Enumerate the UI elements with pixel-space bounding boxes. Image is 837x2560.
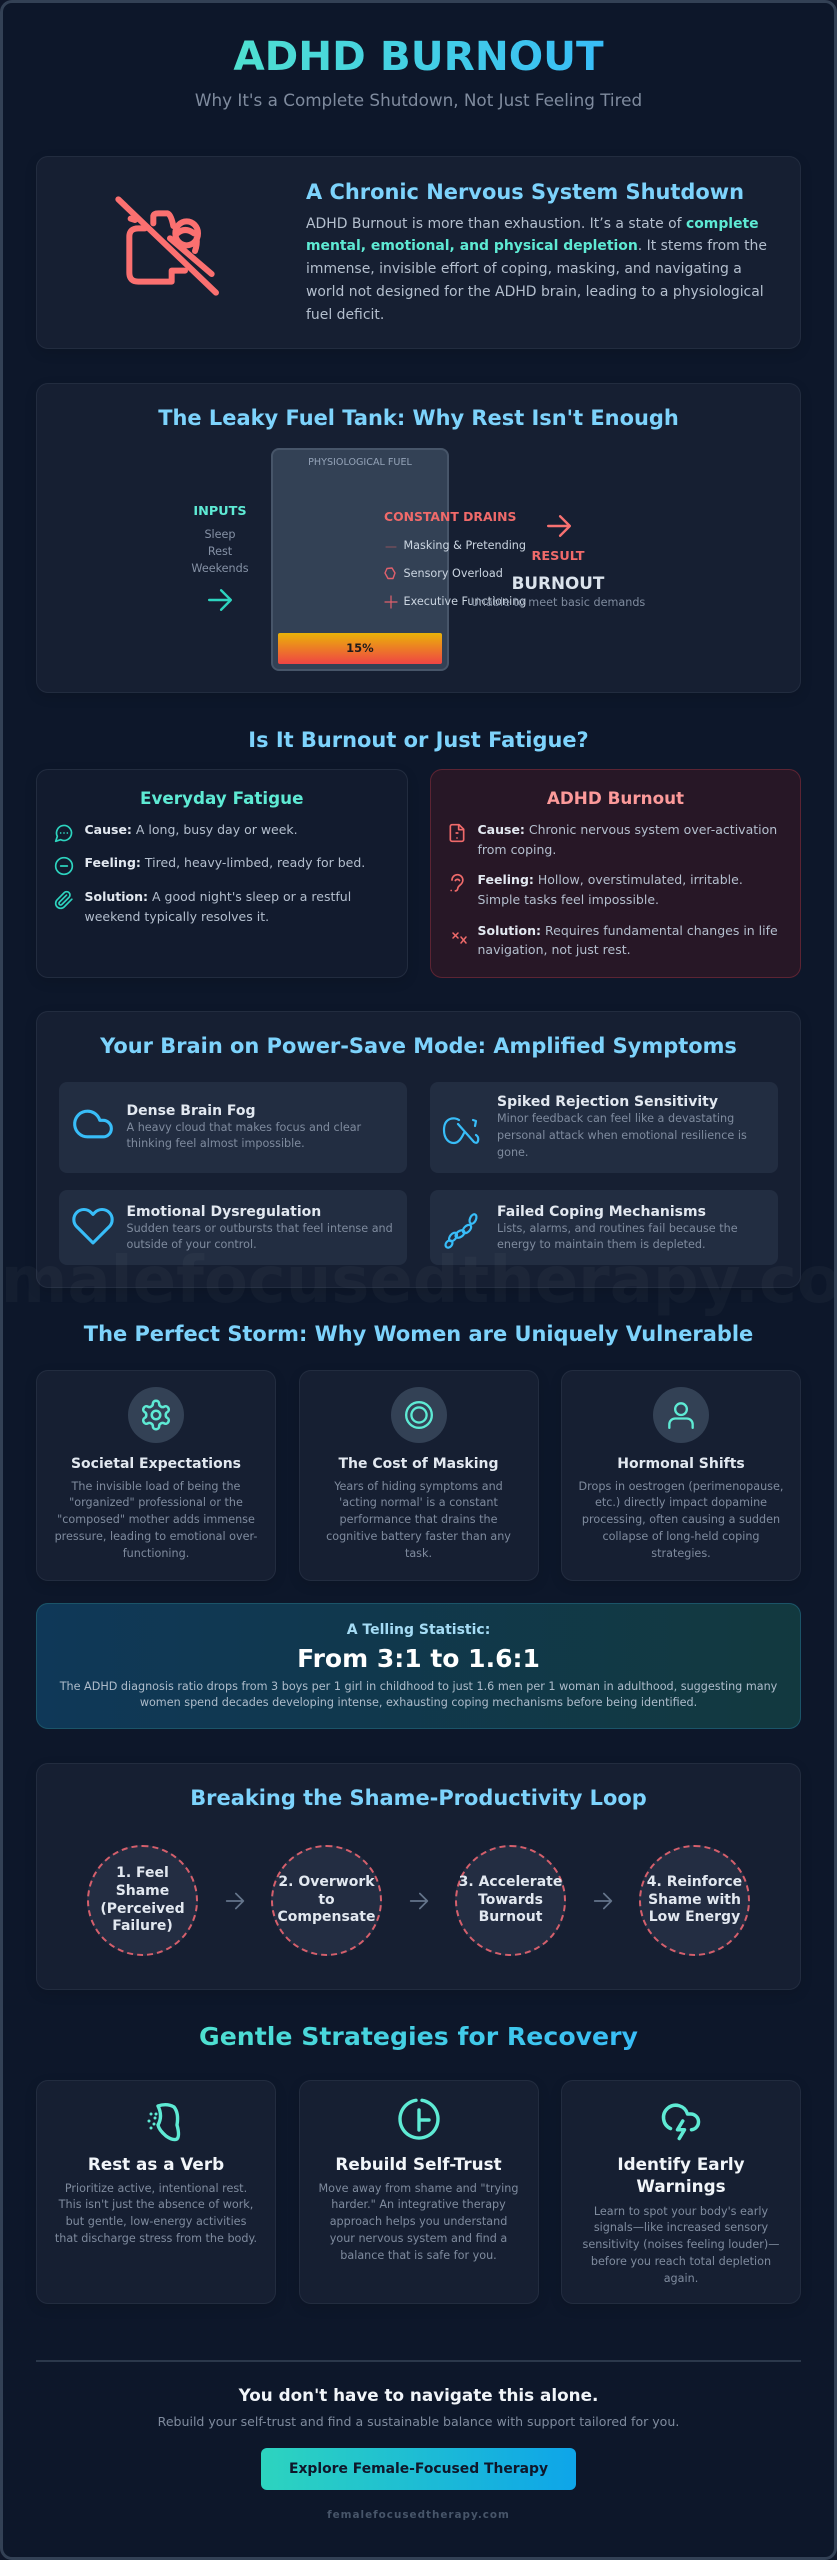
card text: cognitive battery faster than any bbox=[326, 1530, 511, 1543]
symptom text: gone. bbox=[497, 1146, 528, 1159]
card text: The invisible load of being the bbox=[72, 1480, 240, 1492]
card title: Rebuild Self-Trust bbox=[335, 2154, 502, 2174]
card text bbox=[298, 2181, 538, 2265]
fuel tank bbox=[271, 448, 449, 671]
arrow bbox=[593, 1891, 613, 1911]
panel: rest as a verb bbox=[36, 2080, 276, 2304]
symptom title: Failed Coping Mechanisms bbox=[497, 1204, 706, 1220]
symptom text: outside of your control. bbox=[126, 1238, 257, 1251]
icon circle bbox=[390, 1387, 446, 1443]
card text: approach helps you understand bbox=[330, 2215, 507, 2228]
icon: ear bbox=[450, 874, 464, 892]
row: cause: from coping. bbox=[478, 842, 556, 857]
panel heading: Everyday Fatigue bbox=[140, 788, 304, 808]
result description: Unable to meet basic demands bbox=[471, 596, 645, 608]
card text: Prioritize active, intentional rest. bbox=[65, 2182, 247, 2195]
card text: This isn't just the absence of work, bbox=[59, 2198, 253, 2211]
loop step 1: Shame bbox=[116, 1883, 169, 1899]
card text: collapse of long-held coping bbox=[602, 1530, 760, 1543]
panel: telling statistic bbox=[36, 1603, 801, 1729]
icon: gear bbox=[142, 1400, 170, 1430]
statistic label: A Telling Statistic: bbox=[347, 1622, 490, 1638]
body text: ADHD Burnout is more than exhaustion. It’s a state of complete bbox=[306, 216, 759, 232]
inputs bbox=[191, 504, 249, 611]
statistic text: The ADHD diagnosis ratio drops from 3 boys per 1 girl in childhood to just 1.6 men per 1 woman in adulthood, suggesting many bbox=[60, 1680, 777, 1693]
symptom title: Emotional Dysregulation bbox=[126, 1204, 321, 1220]
icon: executive bbox=[384, 595, 398, 609]
row: feeling: Feeling: Hollow, overstimulated, irritable. bbox=[478, 872, 743, 887]
card text: again. bbox=[664, 2272, 698, 2285]
symptom text bbox=[497, 1222, 738, 1251]
panel heading: ADHD Burnout bbox=[547, 788, 684, 808]
symptom text: energy to maintain them is depleted. bbox=[497, 1238, 706, 1251]
row: cause: Cause: A long, busy day or week. bbox=[84, 822, 298, 837]
card text bbox=[579, 1480, 783, 1560]
symptom text bbox=[497, 1112, 747, 1159]
icon circle bbox=[653, 1387, 709, 1443]
body text: fuel deficit. bbox=[306, 307, 384, 323]
card title: Rest as a Verb bbox=[88, 2154, 224, 2174]
title: ADHD BURNOUT bbox=[233, 32, 604, 80]
inputs list: Rest bbox=[208, 545, 232, 558]
loop step 1: Failure) bbox=[112, 1918, 173, 1934]
row: solution: Solution: Requires fundamental changes in life bbox=[478, 922, 778, 938]
footer heading: You don't have to navigate this alone. bbox=[239, 2385, 598, 2405]
heading: burnout or fatigue: Is It Burnout or Just Fatigue? bbox=[248, 728, 589, 752]
card text: 'acting normal' is a constant bbox=[339, 1496, 498, 1509]
symptom text: Lists, alarms, and routines fail because the bbox=[497, 1222, 738, 1234]
icon: file bbox=[450, 824, 464, 842]
icon: subscript x bbox=[452, 932, 467, 944]
card text bbox=[55, 1480, 257, 1560]
body text: world not designed for the ADHD brain, leading to a physiological bbox=[306, 284, 764, 300]
card text: Learn to spot your body's early bbox=[594, 2204, 768, 2218]
statistic text bbox=[60, 1680, 777, 1709]
loop step 1: 1. Feel bbox=[116, 1865, 169, 1881]
inputs label: INPUTS bbox=[193, 504, 247, 519]
card text: Drops in oestrogen (perimenopause, bbox=[579, 1480, 783, 1492]
inputs list bbox=[191, 528, 249, 575]
row: solution: navigation, not just rest. bbox=[478, 942, 631, 957]
card title bbox=[561, 2152, 801, 2197]
footer text: Rebuild your self-trust and find a sustainable balance with support tailored for you. bbox=[158, 2414, 679, 2429]
row: cause bbox=[478, 822, 777, 857]
card text: functioning. bbox=[123, 1547, 189, 1560]
heading: A Chronic Nervous System Shutdown bbox=[306, 180, 744, 204]
heading: The Leaky Fuel Tank: Why Rest Isn't Enough bbox=[158, 406, 679, 430]
card title: Warnings bbox=[636, 2176, 726, 2196]
statistic value: From 3:1 to 1.6:1 bbox=[297, 1644, 540, 1673]
card text: Years of hiding symptoms and bbox=[334, 1480, 503, 1492]
symptom text: A heavy cloud that makes focus and clear bbox=[126, 1121, 361, 1134]
inputs list: Weekends bbox=[191, 562, 249, 575]
loop step 2: to bbox=[318, 1892, 335, 1908]
row: solution: weekend typically resolves it. bbox=[84, 909, 269, 924]
button: Explore Female-Focused Therapy bbox=[289, 2461, 548, 2477]
constant drains bbox=[384, 509, 526, 609]
loop step 2: 2. Overwork bbox=[278, 1874, 375, 1890]
drains label: CONSTANT DRAINS bbox=[384, 509, 516, 524]
symptom text: thinking feel almost impossible. bbox=[126, 1137, 305, 1150]
symptom text: Sudden tears or outbursts that feel intense and bbox=[126, 1222, 393, 1234]
card text: task. bbox=[405, 1547, 432, 1560]
card text: balance that is safe for you. bbox=[340, 2249, 497, 2262]
symptom text: personal attack when emotional resilience is bbox=[497, 1129, 747, 1142]
loop step 3 bbox=[455, 1845, 566, 1956]
panel: identify early warnings bbox=[561, 2080, 801, 2304]
card text: "composed" mother adds immense bbox=[57, 1513, 255, 1526]
loop step 4: 4. Reinforce bbox=[647, 1874, 742, 1890]
symptom title: Spiked Rejection Sensitivity bbox=[497, 1094, 718, 1110]
icon: minus bbox=[386, 546, 396, 548]
heading: Your Brain on Power-Save Mode: Amplified Symptoms bbox=[100, 1034, 737, 1058]
icon: storm cloud bbox=[660, 2100, 702, 2142]
burnout label: BURNOUT bbox=[512, 573, 604, 593]
loop step 3: 3. Accelerate bbox=[459, 1874, 562, 1890]
panel: everyday fatigue bbox=[36, 769, 408, 978]
icon: rejection bbox=[442, 1117, 480, 1144]
arrow bbox=[226, 1892, 244, 1910]
fuel level 15%: 15% bbox=[346, 641, 374, 655]
card text: processing, often causing a sudden bbox=[582, 1513, 780, 1526]
panel: chronic nervous system shutdown bbox=[36, 156, 801, 349]
loop step 1 bbox=[87, 1845, 198, 1956]
loop step 2 bbox=[271, 1845, 382, 1956]
card text: your nervous system and find a bbox=[330, 2232, 507, 2245]
loop step 3: Burnout bbox=[479, 1909, 542, 1925]
drain: sensory overload: Sensory Overload bbox=[404, 566, 503, 580]
heading: Breaking the Shame-Productivity Loop bbox=[190, 1786, 647, 1810]
panel: adhd burnout bbox=[430, 769, 801, 978]
result label: RESULT bbox=[532, 549, 584, 564]
tank label: PHYSIOLOGICAL FUEL bbox=[308, 457, 412, 468]
icon: broken chain bbox=[444, 1213, 478, 1249]
icon: chat bubble bbox=[54, 824, 72, 842]
symptom: rejection sensitivity bbox=[430, 1082, 778, 1173]
subtitle: Why It's a Complete Shutdown, Not Just Feeling Tired bbox=[195, 90, 642, 110]
row: solution: Solution: A good night's sleep or a restful bbox=[84, 889, 351, 904]
loop step 1: (Perceived bbox=[100, 1900, 185, 1916]
row: solution bbox=[84, 889, 351, 924]
body text bbox=[306, 216, 767, 323]
panel: hormonal shifts bbox=[561, 1370, 801, 1580]
arrow: in bbox=[208, 589, 232, 611]
fuel level 15% bbox=[278, 633, 442, 664]
symptom text bbox=[126, 1121, 362, 1150]
card text: before you reach total depletion bbox=[591, 2255, 771, 2268]
card text: etc.) directly impact dopamine bbox=[595, 1496, 767, 1509]
loop step 4: Shame with bbox=[648, 1892, 741, 1908]
symptom text: Minor feedback can feel like a devastating bbox=[497, 1112, 734, 1125]
card text: sensitivity (noises feeling louder)— bbox=[583, 2238, 779, 2251]
row: feeling: Simple tasks feel impossible. bbox=[478, 892, 659, 907]
card text: Move away from shame and "trying bbox=[319, 2182, 518, 2195]
card text bbox=[36, 2181, 276, 2248]
card title: Hormonal Shifts bbox=[617, 1456, 745, 1472]
inputs list: Sleep bbox=[204, 528, 236, 541]
panel: leaky fuel tank bbox=[36, 383, 801, 693]
symptom title: Dense Brain Fog bbox=[126, 1103, 256, 1119]
heading: perfect storm: The Perfect Storm: Why Women are Uniquely Vulnerable bbox=[84, 1322, 753, 1346]
panel: power-save mode symptoms bbox=[36, 1011, 801, 1288]
card text: that discharge stress from the body. bbox=[55, 2232, 257, 2245]
row: solution bbox=[478, 922, 778, 957]
card text: strategies. bbox=[651, 1547, 711, 1560]
result bbox=[471, 549, 645, 608]
loop step 2: Compensate bbox=[278, 1909, 375, 1925]
card text: pressure, leading to emotional over- bbox=[55, 1530, 257, 1543]
symptom text bbox=[126, 1222, 393, 1251]
icon: paperclip bbox=[54, 890, 73, 910]
row: cause: Cause: Chronic nervous system over-activation bbox=[478, 822, 777, 837]
icon circle bbox=[128, 1387, 184, 1443]
symptom: emotional dysregulation bbox=[59, 1190, 407, 1265]
symptom: failed coping bbox=[430, 1190, 778, 1265]
row: feeling bbox=[478, 872, 743, 907]
statistic text: women spend decades developing intense, exhausting coping mechanisms before being identified. bbox=[140, 1696, 697, 1709]
icon: minus circle bbox=[54, 856, 74, 876]
icon: sensory bbox=[384, 567, 396, 580]
symptom: brain fog bbox=[59, 1082, 407, 1173]
footer url: femalefocusedtherapy.com bbox=[327, 2509, 510, 2521]
icon: rest bbox=[140, 2100, 185, 2145]
card text: signals—like increased sensory bbox=[594, 2221, 768, 2234]
card text bbox=[561, 2204, 801, 2287]
row: feeling: Feeling: Tired, heavy-limbed, ready for bed. bbox=[84, 855, 365, 870]
card text: harder." An integrative therapy bbox=[331, 2198, 506, 2211]
icon: crossed-out brain bbox=[115, 196, 219, 296]
card text bbox=[326, 1480, 511, 1560]
icon: heart bbox=[72, 1208, 114, 1245]
panel: societal expectations bbox=[36, 1370, 276, 1580]
drain: executive functioning: Executive Functioning bbox=[404, 594, 526, 608]
loop step 4 bbox=[639, 1845, 750, 1956]
panel: shame-productivity loop bbox=[36, 1763, 801, 1990]
arrow bbox=[409, 1891, 429, 1911]
card title: Societal Expectations bbox=[71, 1456, 241, 1472]
heading: gentle strategies: Gentle Strategies for Recovery bbox=[199, 2022, 638, 2051]
icon: cloud bbox=[73, 1110, 113, 1138]
card title: The Cost of Masking bbox=[338, 1456, 499, 1472]
arrow: out bbox=[547, 515, 571, 537]
card text: but gentle, low-energy activities bbox=[66, 2215, 246, 2228]
body text: immense, invisible effort of coping, masking, and navigating a bbox=[306, 261, 742, 277]
card text: "organized" professional or the bbox=[69, 1496, 243, 1509]
loop step 3: Towards bbox=[478, 1892, 543, 1908]
icon: timer bbox=[396, 2097, 440, 2141]
loop step 4: Low Energy bbox=[649, 1909, 740, 1925]
panel: rebuild self-trust bbox=[298, 2080, 538, 2304]
panel: cost of masking bbox=[298, 1370, 538, 1580]
card title: Identify Early bbox=[617, 2154, 745, 2174]
card text: performance that drains the bbox=[340, 1513, 497, 1526]
button bbox=[261, 2448, 576, 2490]
drain: masking: Masking & Pretending bbox=[404, 539, 526, 552]
icon: target bbox=[405, 1401, 433, 1429]
body text: mental, emotional, and physical depletion. It stems from the bbox=[306, 238, 767, 254]
icon: person bbox=[668, 1402, 694, 1429]
